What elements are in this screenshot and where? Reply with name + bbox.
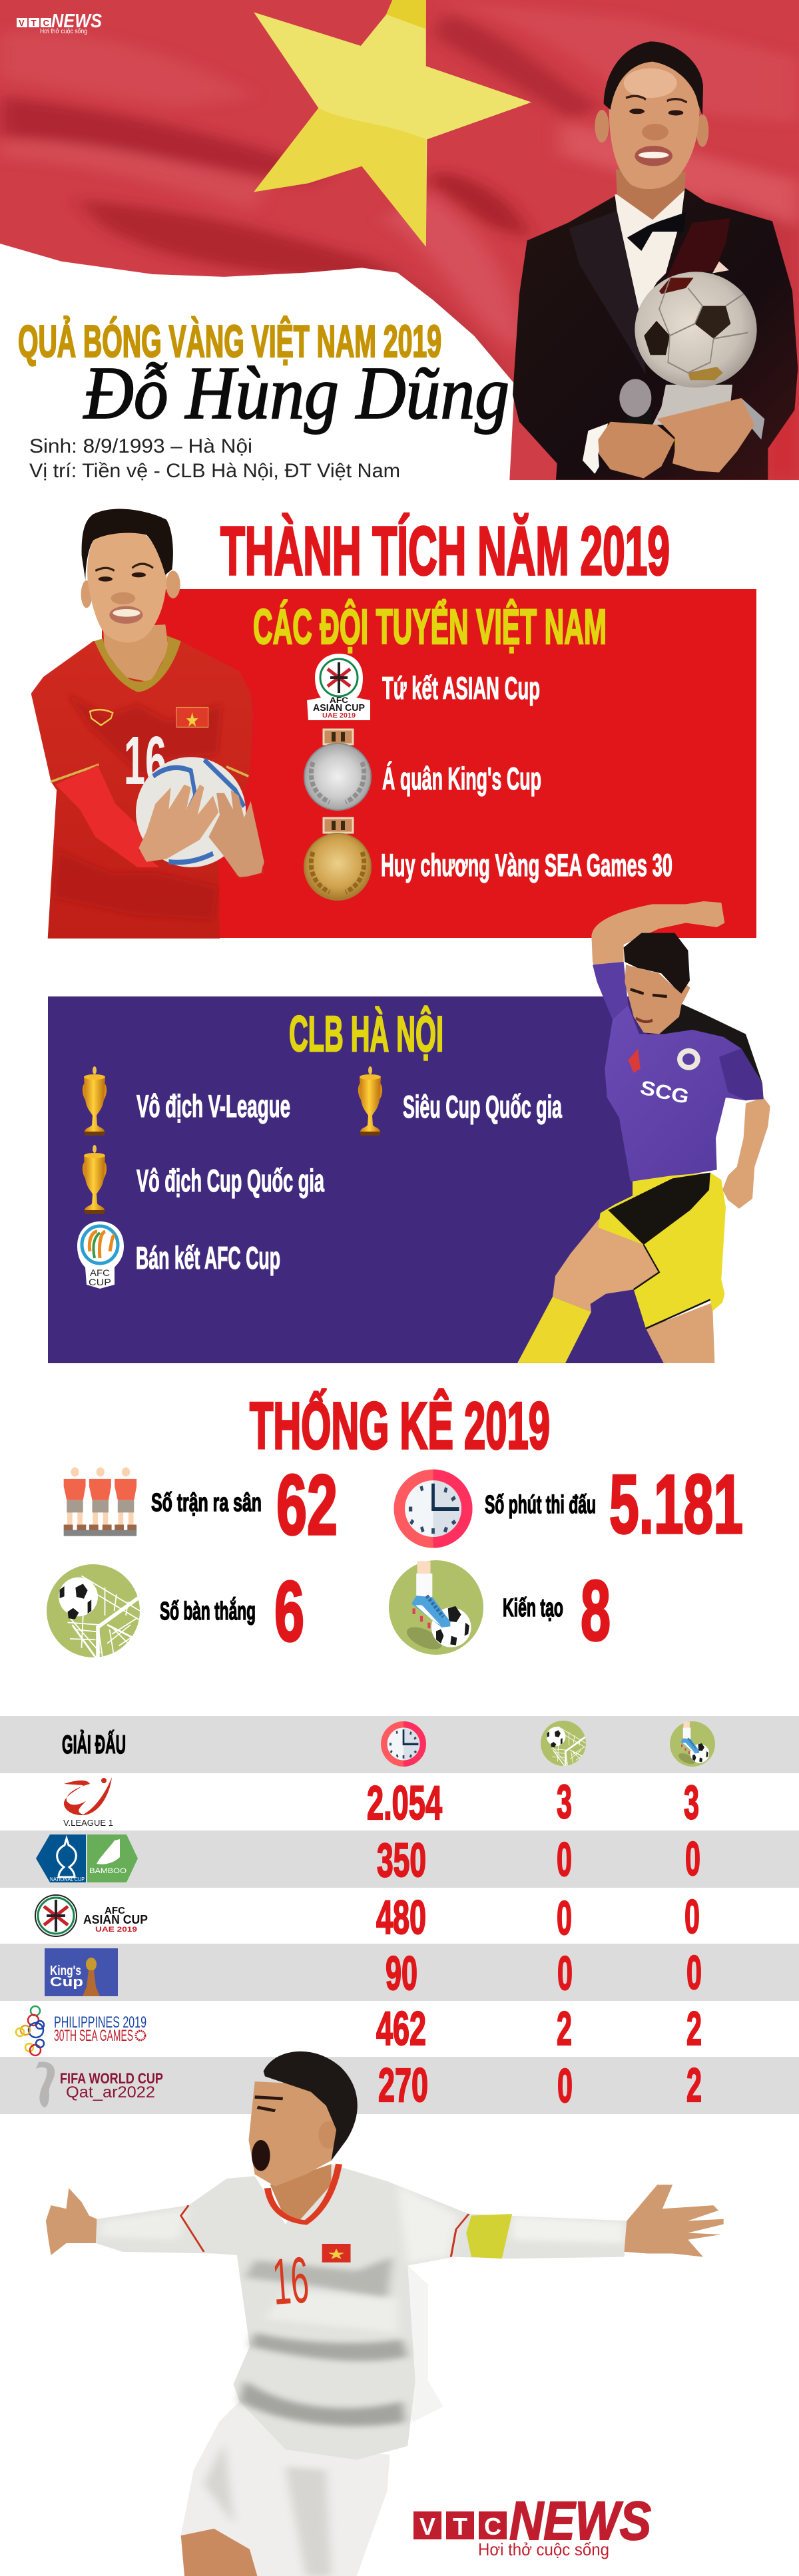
row: V.League [63, 1776, 699, 1830]
row: National Cup [36, 1833, 700, 1887]
text: V-League: Vô địch V-League [136, 1088, 290, 1124]
stat: goals [47, 1564, 304, 1659]
icon: trophy 1 [83, 1066, 107, 1136]
text: Super Cup: Siêu Cup Quốc gia [403, 1089, 562, 1124]
table: competitions [0, 1716, 799, 2114]
row: Asian Cup: ASIAN CUP [83, 1913, 148, 1926]
icon: AFC Cup logo [77, 1221, 124, 1289]
row: World Cup: FIFA WORLD CUP [60, 2070, 163, 2087]
row: National Cup: 0 [685, 1833, 700, 1886]
value: 6 [274, 1564, 304, 1659]
text: AFC Cup: Bán kết AFC Cup [136, 1240, 280, 1275]
logo: VTC News small [17, 11, 103, 35]
value: 62 [276, 1458, 338, 1553]
icon: assist [389, 1560, 483, 1655]
row: World Cup: 0 [557, 2060, 573, 2113]
jersey number: 16 [270, 2243, 311, 2318]
photo: player in red jersey with ball [31, 509, 264, 939]
heading: statistics: THỐNG KÊ 2019 [250, 1389, 550, 1462]
row: King's Cup: 90 [386, 1948, 417, 2000]
row: World Cup: Qat_ar2022 [66, 2083, 155, 2101]
table header [62, 1721, 715, 1767]
icon: AFC Asian Cup logo: ASIAN CUP [313, 702, 365, 714]
row: Asian Cup: AFC [105, 1905, 125, 1916]
icon: silver medal [304, 730, 371, 810]
row: SEA Games: 2 [686, 2003, 702, 2055]
player info [29, 435, 400, 482]
row: King's Cup: 0 [686, 1947, 702, 2000]
row: National Cup: 350 [377, 1834, 426, 1887]
icon: trophy 2 [358, 1066, 382, 1136]
text: Asian Cup: Tứ kết ASIAN Cup [382, 670, 540, 706]
title: player name: Đỗ Hùng Dũng [83, 352, 509, 435]
row: V.League: 2.054 [367, 1777, 442, 1830]
row: King's Cup: 0 [557, 1948, 573, 2000]
row: Asian Cup: 0 [557, 1892, 572, 1945]
stat: matches [64, 1458, 338, 1553]
icon: AFC Asian Cup logo [307, 654, 370, 720]
icon: three players [64, 1467, 136, 1536]
text: National Cup: Vô địch Cup Quốc gia [136, 1163, 324, 1198]
logo: VTC News small: Hơi thở cuộc sống [40, 27, 87, 35]
row: SEA Games: PHILIPPINES 2019 [54, 2014, 146, 2032]
stat: assists [389, 1560, 611, 1659]
label: Số phút thi đấu [485, 1491, 596, 1519]
row: King's Cup [45, 1947, 702, 2000]
panel: Hanoi FC [48, 996, 666, 1363]
logo: VTC News large: T [453, 2513, 467, 2540]
logo: VTC News large [413, 2491, 651, 2559]
icon: goal [47, 1564, 140, 1657]
row: Asian Cup: UAE 2019 [95, 1926, 137, 1934]
text: King's Cup: Á quân King's Cup [382, 761, 541, 796]
row: SEA Games: 30TH SEA GAMES [54, 2027, 133, 2045]
icon: AFC Asian Cup logo: UAE 2019 [322, 712, 356, 720]
label: Kiến tạo [503, 1594, 563, 1622]
panel: national teams [102, 589, 756, 938]
icon: AFC Asian Cup logo: AFC [330, 696, 348, 705]
row: SEA Games [16, 2003, 702, 2055]
logo: VTC News large: C [484, 2513, 501, 2540]
row: National Cup: 0 [557, 1834, 572, 1886]
icon: trophy 3 [83, 1145, 107, 1214]
row: National Cup: BAMBOO [89, 1867, 127, 1875]
icon: AFC Cup logo: CUP [89, 1277, 111, 1287]
hero: flag background [0, 0, 799, 480]
logo: VTC News small: NEWS [51, 11, 103, 32]
logo: VTC News small: VTC [19, 18, 50, 28]
row: V.League: V.LEAGUE 1 [63, 1818, 113, 1828]
row: Asian Cup [35, 1891, 700, 1945]
row: Asian Cup: 480 [376, 1892, 426, 1944]
heading: Hanoi FC: CLB HÀ NỘI [289, 1006, 443, 1062]
row: National Cup: NATIONAL CUP [50, 1876, 85, 1882]
row: SEA Games: 2 [557, 2003, 572, 2055]
row: King's Cup: King's [50, 1964, 81, 1978]
photo: player in tuxedo with golden ball [513, 41, 798, 480]
label: Số bàn thắng [160, 1596, 256, 1625]
row: King's Cup: Cup [50, 1975, 83, 1990]
row: V.League: 3 [684, 1777, 699, 1829]
value: 8 [581, 1564, 611, 1659]
row: World Cup [36, 2059, 702, 2113]
row: World Cup: 2 [686, 2059, 702, 2112]
logo: VTC News large: NEWS [509, 2491, 651, 2551]
row: Asian Cup: 0 [684, 1891, 700, 1944]
stat: minutes [394, 1458, 743, 1551]
sponsor on jersey: SCG [639, 1077, 691, 1108]
subtitle: golden ball: QUẢ BÓNG VÀNG VIỆT NAM 2019 [18, 316, 441, 367]
player info: Vị trí: Tiền vệ - CLB Hà Nội, ĐT Việt Nam [29, 460, 400, 482]
logo: VTC News large: V [419, 2513, 435, 2540]
icon: AFC Cup logo: AFC [90, 1267, 110, 1278]
photo: player in purple Hanoi kit [517, 901, 770, 1363]
logo: VTC News large: Hơi thở cuộc sống [478, 2539, 609, 2559]
row: SEA Games: 462 [376, 2003, 426, 2055]
table header: GIẢI ĐẤU [62, 1730, 126, 1759]
player info: Sinh: 8/9/1993 – Hà Nội [29, 435, 252, 457]
flag star [254, 0, 531, 247]
icon: clock [394, 1470, 473, 1548]
row: World Cup: 270 [378, 2059, 428, 2112]
label: Số trận ra sân [151, 1489, 262, 1517]
jersey number: 16 [124, 722, 166, 799]
row: V.League: 3 [557, 1776, 572, 1828]
icon: gold medal [304, 818, 371, 900]
photo: player in white kit celebrating [46, 2051, 724, 2576]
